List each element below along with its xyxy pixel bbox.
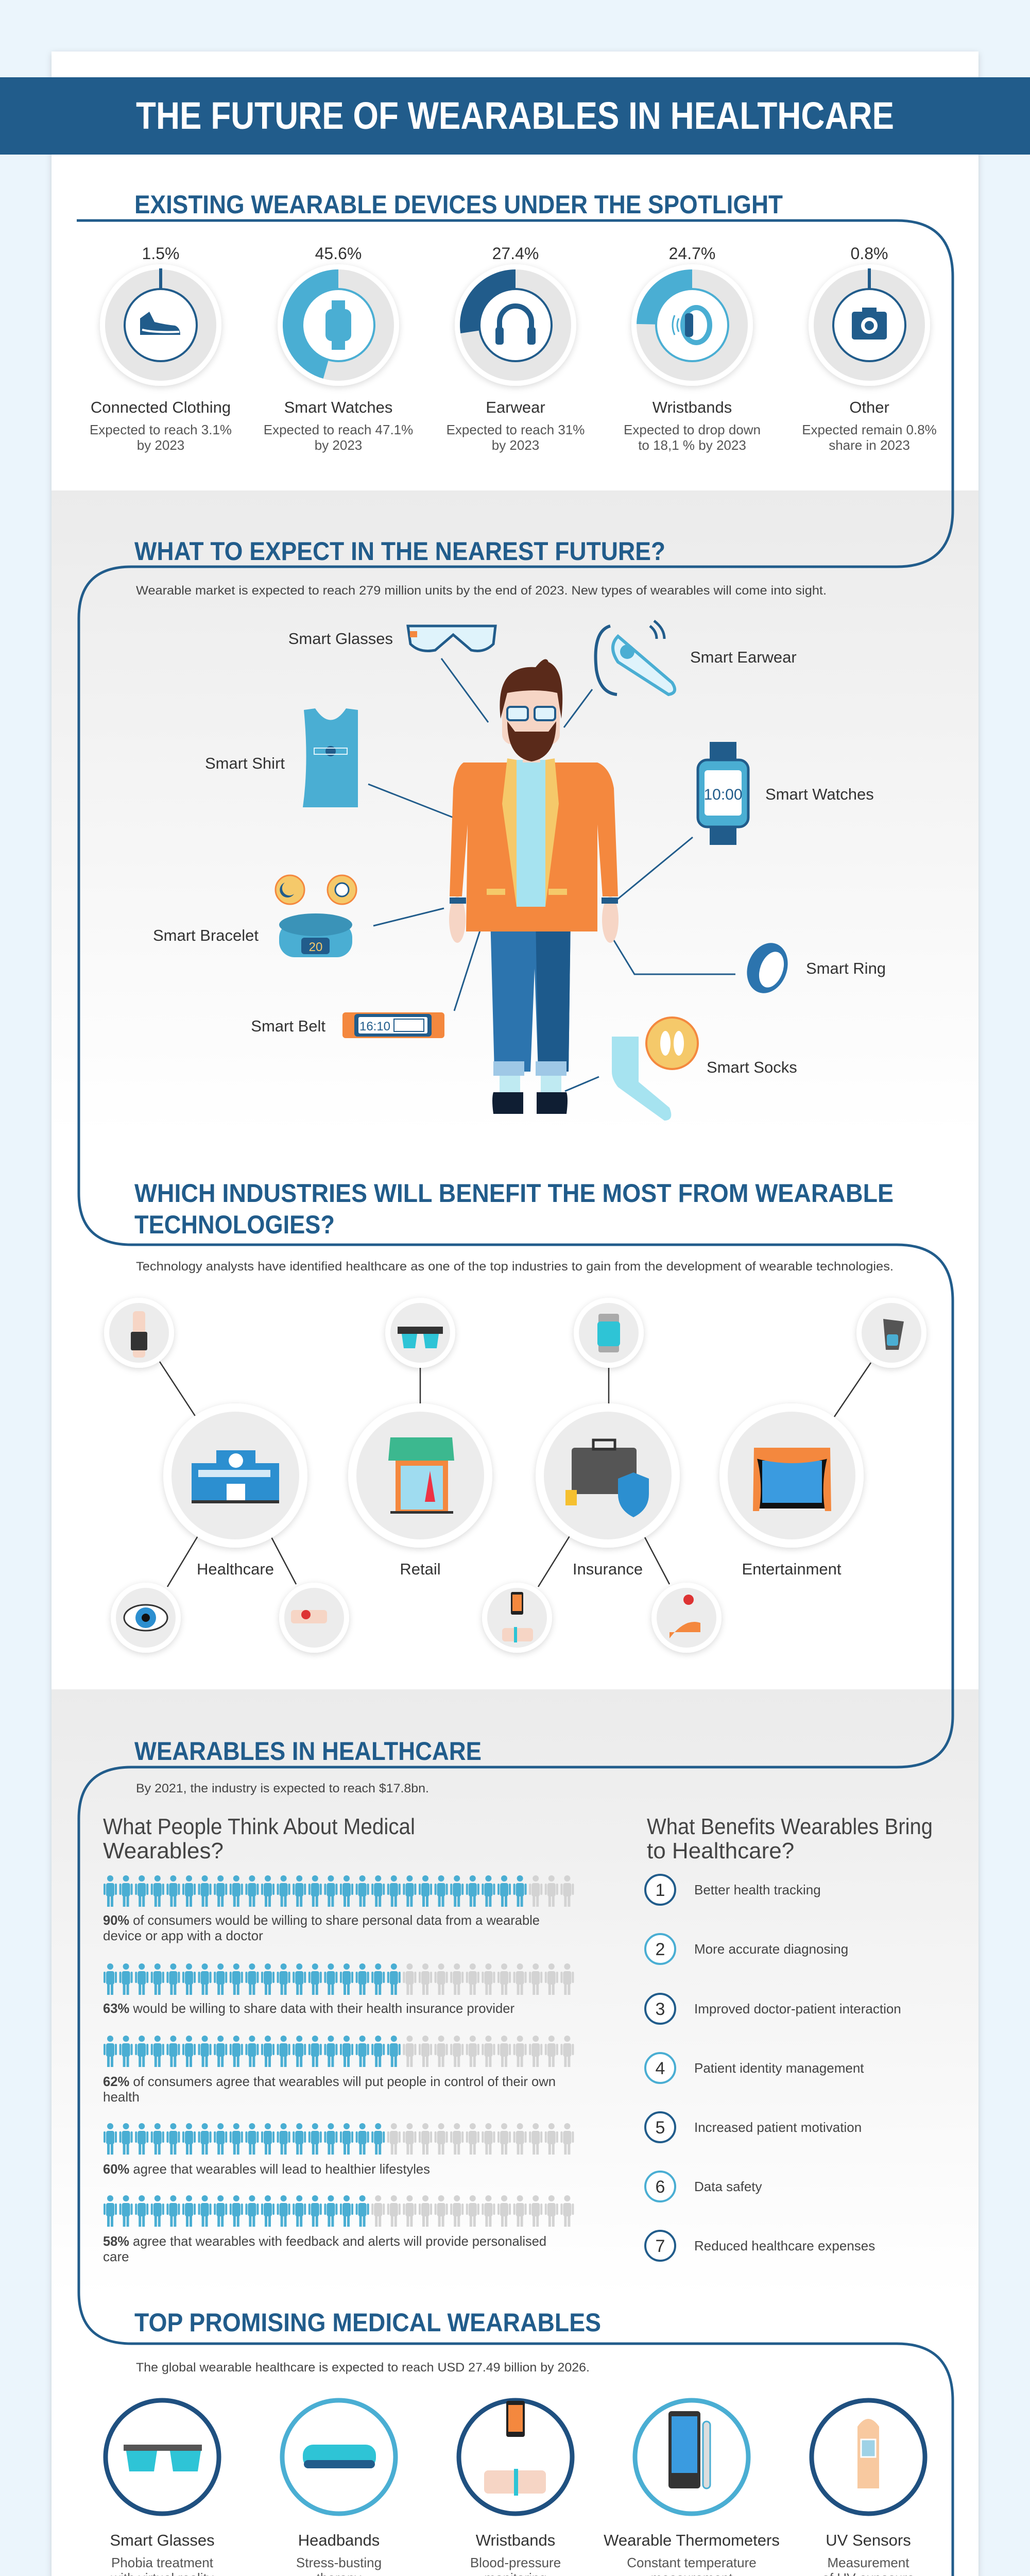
labels row 1: Headbands: [298, 2531, 380, 2549]
icon: smart bracelet: 20: [309, 940, 322, 954]
section 3 heading: [134, 1179, 894, 1239]
donut: connected clothing: by 2023: [137, 437, 184, 453]
icons: [124, 2401, 891, 2576]
panel: what people think: 63% would be willing to share data with their health insurance provider: [103, 2001, 514, 2016]
icon: smart watch: [698, 742, 748, 845]
icon: theater: [753, 1448, 831, 1511]
labels row 1: Wearable Thermometers: [604, 2531, 780, 2549]
icon: insurance: [565, 1440, 649, 1517]
section 1 heading: EXISTING WEARABLE DEVICES UNDER THE SPOTLIGHT: [134, 190, 783, 219]
donut: connected clothing: Expected to reach 3.1%: [90, 422, 232, 437]
donut: other: share in 2023: [829, 437, 910, 453]
panel: what people think: Wearables?: [103, 1838, 224, 1863]
donut: smart watches: by 2023: [315, 437, 362, 453]
donut: smart watches: Smart Watches: [284, 398, 392, 416]
panel: benefits list: Data safety: [694, 2179, 762, 2194]
donut: connected clothing: Connected Clothing: [91, 398, 231, 416]
panel: what people think: 90% of consumers would be willing to share personal data from a wearable: [103, 1912, 540, 1928]
panel: benefits list: Patient identity management: [694, 2060, 864, 2076]
panel: benefits list: What Benefits Wearables Bring: [647, 1814, 933, 1839]
industry labels: Insurance: [573, 1560, 643, 1578]
gray band: nearest future: [52, 490, 978, 1134]
donut: smart watches: 45.6%: [315, 244, 362, 263]
labels row 1: Blood-pressure: [470, 2555, 561, 2570]
pictogram row 63%: [104, 1963, 574, 1995]
panel: benefits list: 7: [656, 2236, 665, 2256]
donut: wristbands: Wristbands: [653, 398, 732, 416]
serpentine connector line: [77, 221, 953, 2576]
donut: wristbands: Expected to drop down: [624, 422, 761, 437]
panel: what people think: care: [103, 2249, 129, 2264]
gray band: wearables in healthcare: [52, 1689, 978, 2297]
panel: what people think: health: [103, 2089, 140, 2105]
icon: smart ring: [740, 937, 795, 999]
panel: benefits list: [645, 1814, 933, 2261]
donut: smart watches: Expected to reach 47.1%: [264, 422, 413, 437]
donut: connected clothing: 1.5%: [142, 244, 179, 263]
icon: hospital: [192, 1450, 279, 1503]
icon: smart socks: [612, 1018, 698, 1121]
panel: wearables on a man: Smart Socks: [707, 1058, 797, 1076]
labels row 1: Wristbands: [476, 2531, 555, 2549]
donut: other: 0.8%: [851, 244, 888, 263]
section 3 subtitle: Technology analysts have identified healthcare as one of the top industries to gain from the development of wearable technologies.: [136, 1260, 894, 1274]
panel: benefits list: 6: [656, 2177, 665, 2197]
small circles: [104, 1298, 926, 1653]
section 4 heading: WEARABLES IN HEALTHCARE: [134, 1737, 482, 1766]
panel: industries network: [104, 1298, 926, 1653]
panel: benefits list: More accurate diagnosing: [694, 1941, 848, 1957]
panel: wearables on a man: Smart Bracelet: [153, 926, 259, 944]
labels row 1: Phobia treatment: [111, 2555, 214, 2570]
section 3 heading: WHICH INDUSTRIES WILL BENEFIT THE MOST FROM WEARABLE: [134, 1179, 894, 1208]
icon: smart glasses: [408, 626, 495, 651]
donut: earwear: 27.4%: [492, 244, 539, 263]
labels row 1: Measurement: [828, 2555, 909, 2570]
donut: other: Expected remain 0.8%: [802, 422, 937, 437]
donut: other: Other: [849, 398, 889, 416]
pictogram row 90%: [104, 1875, 574, 1907]
donut: smart watches: [264, 244, 413, 453]
industry labels: Retail: [400, 1560, 441, 1578]
panel: what people think: [103, 1814, 574, 2264]
panel: benefits list: Improved doctor-patient interaction: [694, 2001, 901, 2016]
icon: smart watch: 10:00: [703, 786, 743, 803]
panel: benefits list: to Healthcare?: [647, 1838, 794, 1863]
panel: wearables on a man: Smart Ring: [806, 959, 886, 977]
panel: top medical wearables grid: [106, 2400, 925, 2576]
pictogram row 58%: [104, 2195, 574, 2227]
industry labels: [197, 1560, 842, 1578]
labels row 1: Constant temperature: [627, 2555, 757, 2570]
panel: wearables on a man: Smart Belt: [251, 1017, 325, 1035]
panel: existing devices donuts: [90, 244, 937, 453]
donut: other: [802, 244, 937, 453]
panel: benefits list: 1: [656, 1880, 665, 1900]
icon: retail store: [388, 1437, 454, 1514]
panel: wearables on a man: Smart Watches: [765, 785, 874, 803]
icon: smart belt: [342, 1012, 444, 1038]
donut: wristbands: to 18,1 % by 2023: [638, 437, 746, 453]
donut: earwear: Earwear: [486, 398, 545, 416]
section 5 heading: TOP PROMISING MEDICAL WEARABLES: [134, 2308, 601, 2337]
title banner: THE FUTURE OF WEARABLES IN HEALTHCARE: [136, 94, 894, 137]
man figure: [449, 659, 619, 1114]
panel: wearables on a man: Smart Earwear: [690, 648, 797, 666]
section 3 heading: TECHNOLOGIES?: [134, 1210, 335, 1239]
panel: what people think: What People Think About Medical: [103, 1814, 415, 1839]
big circles: [163, 1403, 864, 1548]
icon: smart earwear: [596, 621, 675, 694]
small icons: [124, 1311, 904, 1642]
panel: wearables on a man: Smart Glasses: [288, 630, 393, 648]
industry labels: Entertainment: [742, 1560, 842, 1578]
panel: benefits list: 4: [656, 2059, 665, 2078]
donut: earwear: [447, 244, 585, 453]
panel: what people think: 58% agree that wearables with feedback and alerts will provide personalised: [103, 2233, 546, 2249]
pictogram row 60%: [104, 2123, 574, 2155]
donut: connected clothing: [90, 244, 232, 453]
labels row 1: [110, 2531, 915, 2576]
panel: wearables on a man: [153, 621, 886, 1121]
donut: wristbands: [624, 244, 761, 453]
panel: what people think: device or app with a doctor: [103, 1928, 263, 1943]
panel: benefits list: Increased patient motivation: [694, 2120, 862, 2135]
title banner: [0, 77, 1030, 155]
labels row 1: Stress-busting: [296, 2555, 382, 2570]
icon: smart bracelet: [276, 875, 356, 957]
panel: benefits list: Reduced healthcare expenses: [694, 2238, 875, 2253]
industry labels: Healthcare: [197, 1560, 274, 1578]
connector lines: [368, 658, 735, 1091]
section 2 heading: WHAT TO EXPECT IN THE NEAREST FUTURE?: [134, 537, 665, 566]
panel: what people think: 60% agree that wearables will lead to healthier lifestyles: [103, 2161, 430, 2177]
panel: benefits list: 5: [656, 2118, 665, 2138]
panel: benefits list: 3: [656, 1999, 665, 2019]
donut: earwear: by 2023: [492, 437, 539, 453]
icon: smart belt: 16:10: [359, 1020, 390, 1033]
panel: wearables on a man: Smart Shirt: [205, 754, 285, 772]
panel: benefits list: 2: [656, 1940, 665, 1959]
section 2 subtitle: Wearable market is expected to reach 279 million units by the end of 2023. New types of wearables will come into sight.: [136, 584, 827, 598]
panel: what people think: 62% of consumers agree that wearables will put people in control of their own: [103, 2074, 556, 2089]
panel: benefits list: Better health tracking: [694, 1882, 821, 1897]
icon: smart shirt: [303, 708, 358, 807]
section 5 subtitle: The global wearable healthcare is expected to reach USD 27.49 billion by 2026.: [136, 2361, 590, 2375]
labels row 1: UV Sensors: [826, 2531, 911, 2549]
section 4 subtitle: By 2021, the industry is expected to reach $17.8bn.: [136, 1782, 429, 1795]
circles: [106, 2400, 925, 2576]
donut: earwear: Expected to reach 31%: [447, 422, 585, 437]
donut: wristbands: 24.7%: [669, 244, 715, 263]
pictogram row 62%: [104, 2036, 574, 2067]
labels row 1: Smart Glasses: [110, 2531, 215, 2549]
